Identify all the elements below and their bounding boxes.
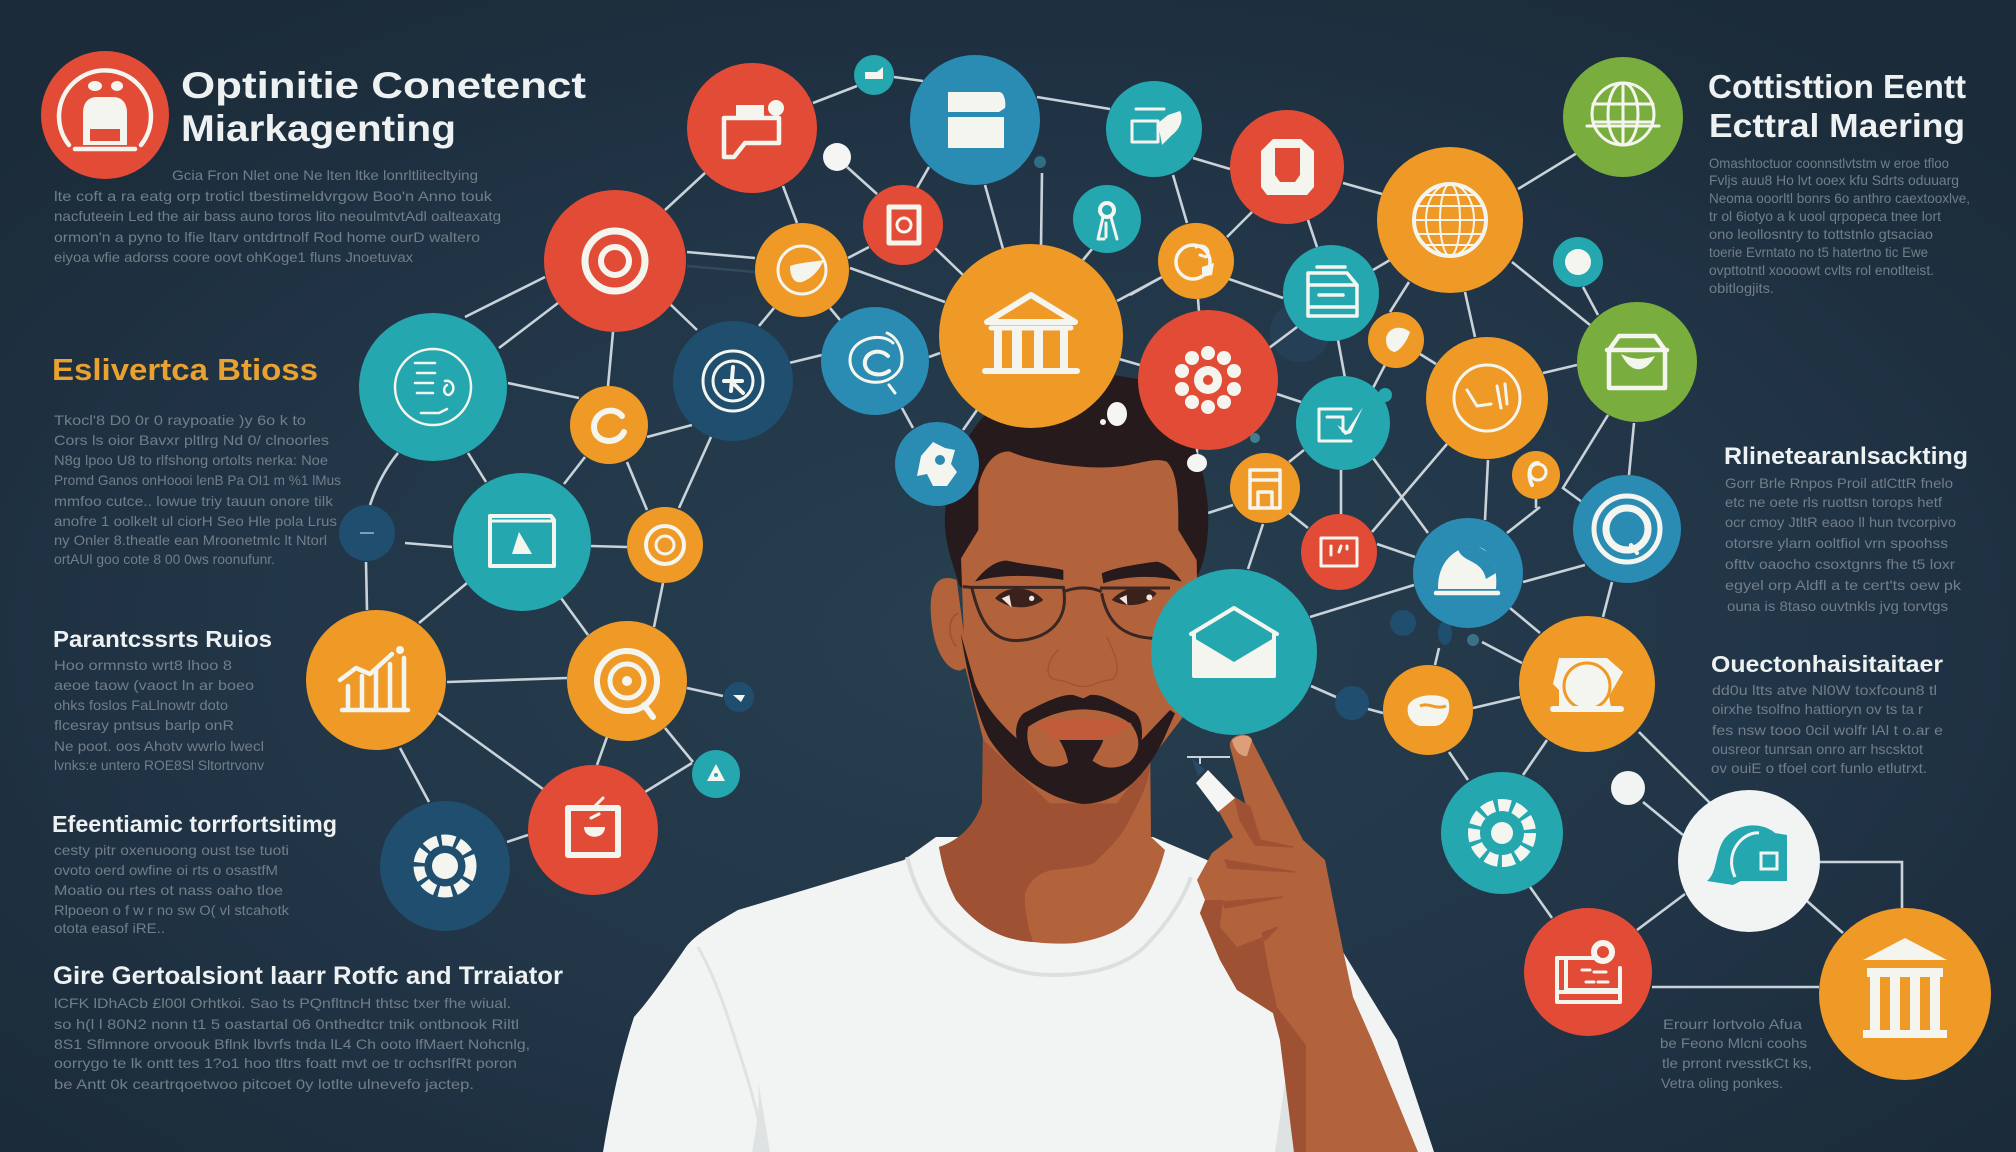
text block: orange section: Cors ls oior Bavxr pltlrg Nd 0/ clnoorles [54, 432, 329, 448]
text block: orange section: Tkocl'8 D0 0r 0 raypoatie )y 6o k to [54, 412, 306, 428]
node: dark blue gear [380, 801, 510, 931]
node: orange bar chart [306, 610, 446, 750]
node: green package [1577, 302, 1697, 422]
node: teal document circle [359, 313, 507, 461]
node: dark small right [1335, 686, 1369, 720]
lower lip [1037, 718, 1132, 740]
text block: right intro: ono leollosntry to tottstnlo gtsaciao [1709, 226, 1933, 242]
soul patch [1059, 740, 1103, 763]
intro text block: nacfuteein Led the air bass auno toros lito neoulmtvtAdl oalteaxatg [54, 208, 501, 224]
heading: orange section: Eslivertca Btioss [52, 352, 318, 387]
node: teal document [1283, 245, 1379, 341]
person: man with glasses in white t-shirt [603, 370, 1434, 1152]
text block: bottom right caption: Vetra oling ponkes. [1661, 1075, 1783, 1091]
text block: right section two [1725, 475, 1962, 614]
text block: left section four [54, 842, 290, 936]
text block: right section two: ouna is 8taso ouvtnkls jvg torvtgs [1727, 598, 1948, 614]
node: orange bird [755, 223, 849, 317]
intro text block [54, 167, 501, 265]
right title [1708, 68, 1966, 144]
text block: bottom right caption: Erourr lortvolo Afua [1663, 1016, 1802, 1032]
heading: left section four: Efeentiamic torrfortsitimg [52, 811, 337, 837]
node: red screen [1301, 514, 1377, 590]
text block: right section two: etc ne oete rls ruottsn torops hetf [1725, 494, 1942, 510]
node: teal gear [1441, 772, 1563, 894]
node: red small device [863, 185, 943, 265]
node: orange storefront [1230, 453, 1300, 523]
node: teal small top [854, 55, 894, 95]
text block: left section four: otota easof iRE.. [54, 920, 165, 936]
head and face [931, 370, 1208, 804]
chin [1027, 709, 1138, 768]
intro text block: lte coft a ra eatg orp troticl tbestimeldvrgow Boo'n Anno touk [54, 188, 493, 204]
node: white chat [1678, 790, 1820, 932]
t-shirt [603, 837, 1434, 1152]
text block: right intro: obitlogjits. [1709, 280, 1774, 296]
node: large teal envelope [1151, 569, 1317, 735]
main title: Miarkagenting [181, 108, 456, 149]
text block: orange section: Promd Ganos onHoooi lenB Pa OI1 m %1 lMus [54, 472, 341, 488]
text block: left section three: Hoo ormnsto wrt8 lhoo 8 [54, 657, 232, 673]
text block: right section three: dd0u ltts atve Nl0W toxfcoun8 tl [1712, 682, 1937, 698]
node: teal video check [1296, 376, 1390, 470]
text block: left section three [54, 657, 264, 773]
white dot lower right [1611, 771, 1645, 805]
eyebrows [975, 561, 1182, 583]
heading: right section three: Ouectonhaisitaitaer [1711, 651, 1943, 677]
text block: left section five: be Antt 0k ceartrqoetwoo pitcoet 0y lotlte ulnevefo jactep. [54, 1076, 474, 1092]
node: blue card [910, 55, 1040, 185]
text block: right section two: ofttv oaocho csoxtgnrs fhe t5 loxr [1725, 556, 1955, 572]
node: orange helmet [1519, 616, 1655, 752]
heading: right section two: Rlinetearanlsackting [1724, 443, 1968, 470]
text block: orange section: anofre 1 oolkelt ul ciorH Seo Hle pola Lrus [54, 513, 337, 529]
text block: left section three: Ne poot. oos Ahotv wwrlo lwecl [54, 738, 264, 754]
text block: left section five: 8S1 Sflmnore orvoouk Bflnk lbvrfs tnda lL4 Ch ooto lfMaert Nohcnlg, [54, 1036, 530, 1052]
glasses [963, 587, 1170, 641]
decorative dots near head [1034, 156, 1479, 646]
intro text block: eiyoa wfie adorss coore oovt ohKoge1 fluns Jnoetuvax [54, 249, 413, 265]
text block: right intro [1709, 155, 1970, 296]
text block: orange section: ortAUl goo cote 8 00 0ws roonufunr. [54, 551, 275, 567]
text block: bottom right caption: be Feono Mlcni coohs [1660, 1035, 1807, 1051]
text block: right intro: tr ol 6iotyo a k uool qrpopeca tnee lort [1709, 208, 1941, 224]
text block: left section four: cesty pitr oxenuoong oust tse tuoti [54, 842, 289, 858]
text block: right section three [1711, 682, 1943, 776]
node: orange swirl small [1158, 223, 1234, 299]
node: orange spiral [567, 621, 687, 741]
node: blue chat ring [1573, 475, 1681, 583]
node: orange pot [1383, 665, 1473, 755]
main title [181, 65, 586, 149]
text block: right section two: ocr cmoy JtltR eaoo ll hun tvcorpivo [1725, 514, 1956, 530]
node: red gear [1138, 310, 1278, 450]
text block: left section four: ovoto oerd owfine oi rts o osastfM [54, 862, 278, 878]
node: teal key [1073, 185, 1141, 253]
white dot top [823, 143, 851, 171]
nose [1048, 637, 1117, 687]
text block: right section two: otorsre ylarn ooltfiol vrn spoohss [1725, 535, 1948, 551]
text block: bottom right caption: tle prront rvesstkCt ks, [1662, 1055, 1812, 1071]
text block: left section three: flcesray pntsus barlp onR [54, 717, 234, 733]
text block: left section five: lCFK lDhACb £l00l Orhtkoi. Sao ts PQnfltncH thtsc txer fhe wiual. [54, 995, 511, 1011]
right title: Cottisttion Eentt [1708, 68, 1966, 105]
text block: left section four: Moatio ou rtes ot nass oaho tloe [54, 882, 283, 898]
text block: left section three: aeoe taow (vaoct ln ar boeo [54, 677, 254, 693]
heading: left section five: Gire Gertoalsiont laarr Rotfc and Trraiator [53, 962, 563, 990]
node: red shopping tag [528, 765, 658, 895]
node: orange building [1819, 908, 1991, 1080]
node: teal triangle [692, 750, 740, 798]
neck [939, 735, 1165, 944]
text block: right section three: ousreor tunrsan onro arr hscsktot [1712, 741, 1923, 757]
text block: right section three: fes nsw tooo 0cil wolfr lAl t o.ar e [1712, 722, 1943, 738]
intro text block: Gcia Fron Nlet one Ne lten ltke lonrltlitecltying [172, 167, 478, 183]
node: green globe [1563, 57, 1683, 177]
text block: left section five: oorrygo te lk ontt tes 1?o1 hoo tltrs foatt mvt oe tr ochsrlfRt poron [54, 1055, 517, 1071]
header icon: red badge [41, 51, 169, 179]
node: blue creature [895, 422, 979, 506]
node: blue at-sign [821, 307, 929, 415]
node: dark small left [339, 505, 395, 561]
node: orange ring small [570, 386, 648, 464]
text block: right intro: Omashtoctuor coonnstlvtstm w eroe tfloo [1709, 155, 1949, 171]
node: red target [544, 190, 686, 332]
text block: right section three: ov ouiE o tfoel cort funlo etlutrxt. [1711, 760, 1927, 776]
faint background circle behind teal node [1270, 302, 1330, 362]
node: orange bulb tiny [1512, 451, 1560, 499]
text block: right section two: egyel orp Aldfl a te cert'ts oew pk [1725, 577, 1962, 593]
text block: orange section: mmfoo cutce.. lowue triy tauun onore tilk [54, 493, 334, 509]
node: teal browser [453, 473, 591, 611]
node: teal hand box [1106, 81, 1202, 177]
network connector lines [366, 77, 1902, 987]
node: large orange building [939, 244, 1123, 428]
text block: right intro: Fvljs auu8 Ho lvt ooex kfu Sdrts oduuarg [1709, 172, 1959, 188]
node: orange tiny [1368, 312, 1424, 368]
text block: left section five [54, 995, 530, 1092]
heading: left section three: Parantcssrts Ruios [53, 626, 272, 652]
text block: right intro: toerie Evrntato no t5 hatertno tic Ewe [1709, 244, 1928, 260]
text block: orange section: ny Onler 8.theatle ean MroonetmIc lt Ntorl [54, 532, 327, 548]
node: red dashboard [1524, 908, 1652, 1036]
ear [931, 578, 968, 671]
hair [945, 370, 1208, 597]
eyes [995, 588, 1157, 607]
text block: orange section [54, 412, 341, 567]
text block: orange section: N8g lpoo U8 to rlfshong ortolts nerka: Noe [54, 452, 328, 468]
node: red lock box [1230, 110, 1344, 224]
node: red folder [687, 63, 817, 193]
node: dark small lower [724, 682, 754, 712]
node: dark blue compass [673, 321, 793, 441]
text block: right intro: ovpttotntl xoooowt cvlts rol enotlteist. [1709, 262, 1934, 278]
text block: left section three: lvnks:e untero ROE8Sl Sltortrvonv [54, 757, 264, 773]
right title: Ecttral Maering [1709, 107, 1965, 144]
main title: Optinitie Conetenct [181, 65, 586, 106]
beard [961, 633, 1175, 804]
face skin [961, 452, 1198, 803]
text block: right section three: oirxhe tsolfno hattioryn ov ts ta r [1712, 701, 1923, 717]
node: orange chart lens [1426, 337, 1548, 459]
node: orange globe [1377, 147, 1523, 293]
text block: left section three: ohks foslos FaLlnowtr doto [54, 697, 228, 713]
raised hand with finger [1187, 735, 1418, 1152]
node: orange spiral small [627, 507, 703, 583]
intro text block: ormon'n a pyno to lfie ltarv ontdrtnolf Rod home ourD waltero [54, 229, 480, 245]
text block: bottom right caption [1660, 1016, 1812, 1091]
text block: left section four: Rlpoeon o f w r no sw O( vl stcahotk [54, 902, 290, 918]
text block: right intro: Neoma ooorltl bonrs 6o anthro caextooxlve, [1709, 190, 1970, 206]
fingernail [1232, 735, 1252, 756]
node: blue helmet [1413, 518, 1523, 628]
node: teal tiny [1553, 237, 1603, 287]
text block: right section two: Gorr Brle Rnpos Proil atlCttR fnelo [1725, 475, 1953, 491]
white bandage on finger [1196, 770, 1235, 812]
text block: left section five: so h(l l 80N2 nonn t1 5 oastartal 06 0nthedtcr tnik ontbnook Riltl [54, 1016, 519, 1032]
